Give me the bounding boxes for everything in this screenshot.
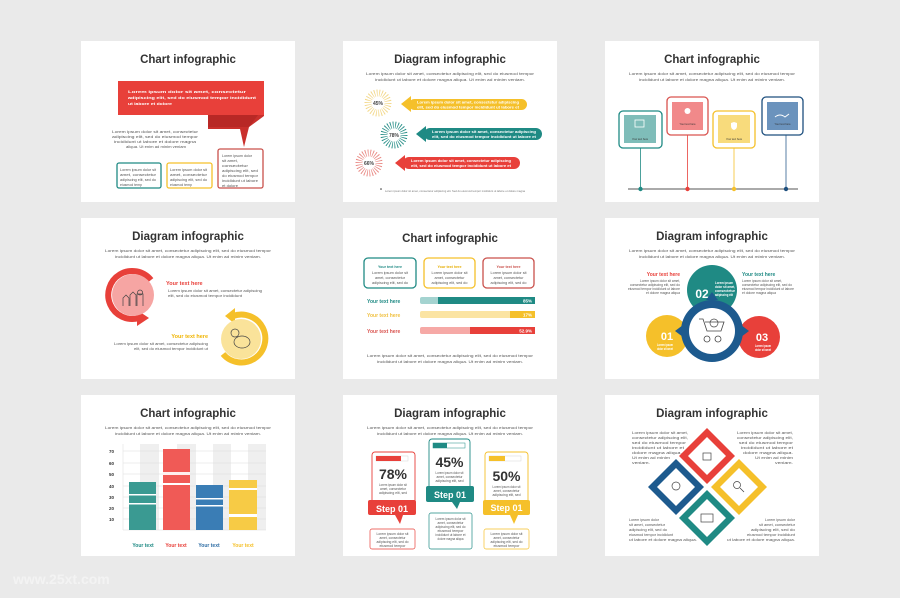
subtitle	[367, 425, 534, 436]
title: Diagram infographic	[132, 231, 245, 243]
box teal: amet, consectetur	[120, 172, 157, 177]
card 50%: 50%	[492, 468, 521, 484]
subtitle: incididunt ut labore et dolore magna aliqua. Ut enim ad minim veniam.	[639, 254, 785, 259]
text bottom-left: adipiscing elit, sed do	[629, 527, 668, 532]
subtitle: incididunt ut labore et dolore magna aliqua. Ut enim ad minim veniam.	[639, 77, 785, 82]
card 50%: Step 01	[490, 503, 523, 513]
box yellow: eiusmod temp	[170, 182, 193, 187]
red ribbon banner: Lorem ipsum dolor sit amet, consectetur	[128, 89, 247, 94]
title: Chart infographic	[140, 54, 237, 66]
card 45%: Lorem ipsum dolor sit	[436, 516, 466, 521]
title: Chart infographic	[140, 408, 237, 420]
text bottom-left	[629, 517, 697, 542]
card 78%: Step 01	[376, 504, 408, 514]
text bottom-right: ut labore et dolore magna aliqua.	[727, 537, 795, 542]
title: Diagram infographic	[656, 408, 769, 420]
card blue: Your text here	[774, 122, 791, 126]
title: Chart infographic	[402, 233, 499, 245]
left text: et dolore magna aliqua	[646, 290, 681, 295]
text block: adipiscing elit, sed do eiusmod tempor	[112, 134, 199, 139]
slide 7: bar chart	[81, 395, 295, 556]
box red: Lorem ipsum dolor	[222, 153, 253, 158]
left text: consectetur adipiscing elit, sed do	[630, 282, 681, 287]
text block: incididunt ut labore et dolore magna	[114, 139, 197, 144]
bar blue	[196, 485, 223, 530]
card 45%: amet, consectetur	[438, 520, 464, 525]
box red	[218, 149, 263, 188]
card 50%: amet, consectetur	[494, 488, 520, 493]
box red: consectetur	[222, 163, 249, 168]
circle 03: 03	[756, 332, 768, 344]
text bottom-right	[727, 517, 796, 542]
bar labels: Your text	[165, 543, 187, 549]
bar 17%	[367, 311, 535, 319]
text top-right	[737, 430, 794, 465]
text top-right: Ut enim ad minim	[755, 455, 794, 460]
red text	[166, 281, 262, 298]
subtitle: incididunt ut labore et dolore magna aliqua. Ut enim ad minim veniam.	[115, 431, 261, 436]
text top-right: consectetur adipiscing elit,	[737, 435, 793, 440]
card yellow: Your text here	[726, 137, 743, 141]
text top-right: dolore magna aliqua.	[743, 450, 793, 455]
slide 2: diagram arrows with sunbursts	[343, 41, 557, 202]
text top-left: dolore magna aliqua.	[632, 450, 682, 455]
card 45%: Lorem ipsum dolor sit	[436, 470, 464, 475]
card 78%	[368, 452, 416, 549]
slide 9: diagram diamonds	[605, 395, 819, 556]
box yellow: Lorem ipsum dolor sit	[432, 270, 468, 275]
text block: aliqua. Ut enim ad minim veniam	[126, 144, 187, 149]
text top-right: sed do eiusmod tempor	[739, 440, 794, 445]
arrow teal	[416, 126, 542, 142]
timeline line	[628, 188, 798, 190]
y axis labels: 30	[109, 495, 115, 500]
box red: et dolore	[222, 183, 239, 188]
circle 02: dolor sit amet,	[715, 284, 735, 289]
card 45%: adipiscing elit, sed	[436, 478, 464, 483]
box yellow: Your text here	[438, 265, 461, 269]
card 78%: eiusmod tempor	[380, 543, 406, 548]
card blue	[762, 97, 803, 191]
title: Chart infographic	[664, 54, 761, 66]
box teal: eiusmod temp	[120, 182, 143, 187]
bar labels	[132, 543, 254, 549]
subtitle: Lorem ipsum dolor sit amet, consectetur adipiscing elit, sed do eiusmod tempor	[105, 248, 272, 253]
box red	[483, 258, 534, 288]
diamond blue	[648, 459, 704, 515]
card 45%: 45%	[435, 454, 464, 470]
yellow text: Your text here	[171, 334, 208, 340]
left text: Your text here	[647, 272, 680, 278]
card 78%: Lorem ipsum dolor sit	[376, 531, 409, 536]
bar labels: Your text	[132, 543, 154, 549]
bar teal	[129, 482, 156, 530]
card 50%: Lorem ipsum dolor sit	[492, 484, 521, 489]
box teal: amet, consectetur	[375, 275, 406, 280]
subtitle: Lorem ipsum dolor sit amet, consectetur adipiscing elit, sed do eiusmod tempor	[629, 248, 796, 253]
card 50%: adipiscing elit, sed do	[490, 539, 523, 544]
box red: Your text here	[497, 265, 520, 269]
circle 02: Lorem ipsum	[715, 280, 733, 285]
left text	[628, 272, 681, 295]
box teal	[364, 258, 416, 288]
card 45%	[426, 439, 474, 549]
slide 1: chart infographic ribbon	[81, 41, 295, 202]
red text: Lorem ipsum dolor sit amet, consectetur adipiscing	[168, 288, 262, 293]
red text: elit, sed do eiusmod tempor incididunt	[168, 293, 243, 298]
subtitle	[629, 71, 796, 82]
title: Diagram infographic	[394, 54, 507, 66]
text top-left: consectetur adipiscing elit,	[632, 435, 688, 440]
box yellow: adipiscing elit, sed do	[170, 177, 208, 182]
box red: Lorem ipsum dolor sit	[490, 270, 527, 275]
red ribbon banner	[118, 81, 264, 147]
title: Diagram infographic	[656, 231, 769, 243]
circle 03: Lorem ipsum	[755, 343, 771, 348]
circle 01: dolor sit amet	[657, 346, 673, 351]
text bottom-right: eiusmod tempor incididunt	[747, 532, 796, 537]
card 50%	[483, 452, 530, 549]
subtitle	[105, 248, 272, 259]
yellow cycle icon	[221, 308, 265, 363]
text bottom-left: ut labore et dolore magna aliqua.	[629, 537, 697, 542]
bar 52.9%: Your text here	[367, 329, 400, 335]
text bottom-right: sit amet, consectetur	[759, 522, 796, 527]
bar 85%: 85%	[523, 298, 532, 304]
box red: sit amet,	[222, 158, 238, 163]
card 45%: eiusmod tempor	[438, 528, 464, 533]
y axis labels: 60	[109, 461, 115, 466]
subtitle	[629, 248, 796, 259]
left text: Lorem ipsum dolor sit amet,	[640, 278, 680, 283]
circle 03	[738, 316, 780, 358]
card teal: Your text here	[632, 137, 649, 141]
yellow text: Lorem ipsum dolor sit amet, consectetur adipiscing	[114, 341, 208, 346]
box yellow: Lorem ipsum dolor sit	[170, 167, 208, 172]
box yellow	[424, 258, 475, 288]
subtitle	[105, 425, 272, 436]
circle 01	[646, 315, 688, 357]
card 78%: Lorem ipsum dolor sit	[379, 482, 408, 487]
bar labels: Your text	[198, 543, 220, 549]
bar 52.9%: 52.9%	[519, 328, 532, 334]
box red: do eiusmod tempor	[222, 173, 259, 178]
box yellow: amet, consectetur	[170, 172, 208, 177]
right text: eiusmod tempor incididunt ut labore	[742, 286, 795, 291]
sunburst 45%: 45%	[373, 101, 384, 107]
subtitle: Lorem ipsum dolor sit amet, consectetur adipiscing elit, sed do eiusmod tempor	[105, 425, 272, 430]
box teal	[117, 163, 161, 188]
text bottom-left: sit amet, consectetur	[629, 522, 666, 527]
card 78%: amet, consectetur	[380, 535, 406, 540]
red ribbon banner: adipiscing elit, sed do eiusmod tempor incididunt	[128, 95, 257, 100]
footer text: Lorem ipsum dolor sit amet, consectetur adipiscing elit, sed do eiusmod tempor	[367, 353, 534, 358]
right text: Your text here	[742, 272, 775, 278]
y axis labels: 70	[109, 449, 115, 454]
diamond teal	[679, 490, 735, 546]
bar 85%	[367, 297, 535, 305]
slide 4: diagram circular arrows	[81, 218, 295, 379]
text bottom-right: adipiscing elit, sed do	[751, 527, 796, 532]
y axis labels	[109, 449, 115, 522]
slide 5: chart progress bars	[343, 218, 557, 379]
right text: Lorem ipsum dolor sit amet,	[742, 278, 782, 283]
subtitle: Lorem ipsum dolor sit amet, consectetur adipiscing elit, sed do eiusmod tempor	[366, 71, 535, 76]
card 45%: Step 01	[434, 490, 466, 500]
text bottom-left: eiusmod tempor incididunt	[629, 532, 674, 537]
box teal: Lorem ipsum dolor sit	[372, 270, 409, 275]
text top-left: Lorem ipsum dolor sit amet,	[632, 430, 688, 435]
yellow text	[114, 334, 209, 351]
box teal: adipiscing elit, sed do	[120, 177, 157, 182]
text top-left	[632, 430, 688, 465]
card 50%: adipiscing elit, sed	[492, 492, 520, 497]
arrow red: Lorem ipsum dolor sit amet, consectetur adipiscing	[411, 158, 512, 163]
circle 01: 01	[661, 331, 673, 343]
text top-right: veniam.	[775, 460, 793, 465]
text bottom-right: Lorem ipsum dolor	[765, 517, 796, 522]
sunburst 66%: 66%	[364, 161, 375, 167]
box teal: Your text here	[378, 265, 402, 269]
bar 17%: Your text here	[367, 313, 400, 319]
slide 3: chart timeline boxes	[605, 41, 819, 202]
text top-left: veniam.	[632, 460, 650, 465]
box yellow: amet, consectetur	[434, 275, 465, 280]
subtitle	[366, 71, 535, 82]
sunburst 78%	[384, 125, 404, 145]
card 78%: 78%	[379, 466, 408, 482]
text top-right: Lorem ipsum dolor sit amet,	[737, 430, 793, 435]
y axis labels: 50	[109, 472, 115, 477]
sunburst 66%	[359, 153, 379, 173]
box red: adipiscing elit, sed do	[490, 280, 527, 285]
diamond red	[679, 428, 735, 484]
subtitle: incididunt ut labore et dolore magna aliqua. Ut enim ad minim veniam.	[377, 431, 523, 436]
arrow teal: elit, sed do eiusmod tempor incididunt ut labore et	[432, 134, 537, 139]
card 78%: adipiscing elit, sed	[379, 490, 407, 495]
bar labels: Your text	[232, 543, 254, 549]
subtitle: Lorem ipsum dolor sit amet, consectetur adipiscing elit, sed do eiusmod tempor	[367, 425, 534, 430]
central ring with cart	[675, 292, 749, 362]
text top-left: sed do eiusmod tempor	[632, 440, 687, 445]
card 78%: amet, consectetur	[380, 486, 407, 491]
arrow red	[395, 155, 520, 171]
slide 8: diagram step cards	[343, 395, 557, 556]
chart grid	[123, 444, 266, 530]
text top-left: incididunt ut labore et	[632, 445, 685, 450]
title: Diagram infographic	[394, 408, 507, 420]
arrow yellow: Lorem ipsum dolor sit amet, consectetur adipiscing	[417, 100, 520, 104]
card 45%: incididunt ut labore et	[436, 532, 466, 537]
text top-left: Ut enim ad minim	[632, 455, 671, 460]
right text: et dolore magna aliqua	[742, 290, 777, 295]
left text: eiusmod tempor incididunt ut labore	[628, 286, 681, 291]
box yellow	[167, 163, 212, 188]
y axis labels: 20	[109, 506, 115, 511]
circle 02: adipiscing elit	[715, 292, 733, 297]
footer text: incididunt ut labore et dolore magna aliqua. Ut enim ad minim veniam.	[377, 359, 523, 364]
arrow red: elit, sed do eiusmod tempor incididunt ut labore et	[411, 163, 512, 168]
box teal: adipiscing elit, sed do	[372, 280, 409, 285]
text bottom-left: Lorem ipsum dolor	[629, 517, 660, 522]
subtitle: incididunt ut labore et dolore magna aliqua. Ut enim ad minim veniam.	[375, 77, 525, 82]
subtitle: Lorem ipsum dolor sit amet, consectetur adipiscing elit, sed do eiusmod tempor	[629, 71, 796, 76]
yellow text: elit, sed do eiusmod tempor incididunt ut	[134, 346, 209, 351]
card yellow	[713, 111, 755, 191]
circle 02: consectetur	[715, 288, 735, 293]
y axis labels: 10	[109, 517, 115, 522]
watermark: www.25xt.com	[12, 571, 110, 587]
arrow teal: Lorem ipsum dolor sit amet, consectetur adipiscing	[432, 129, 537, 134]
right text	[742, 272, 795, 295]
sunburst 45%	[368, 93, 388, 113]
right text: consectetur adipiscing elit, sed do	[742, 282, 793, 287]
bar 17%: 17%	[523, 312, 532, 318]
card teal	[619, 111, 662, 191]
text block: Lorem ipsum dolor sit amet, consectetur	[112, 129, 199, 134]
text block	[112, 129, 199, 149]
red ribbon banner: ut labore et dolore	[128, 101, 173, 106]
footnote: Lorem ipsum dolor sit amet, consectetur adipiscing elit. Sed do eiusmod tempor incididunt ut labore et dolore magna	[385, 190, 526, 193]
card 50%: Lorem ipsum dolor sit	[490, 531, 523, 536]
diamond yellow	[711, 459, 767, 515]
bar red	[163, 449, 190, 530]
circle 02: 02	[695, 287, 709, 301]
arrow yellow: elit, sed do eiusmod tempor incididunt ut labore et	[417, 104, 520, 110]
card 45%: dolore magna aliqua	[438, 536, 464, 541]
card 50%: eiusmod tempor	[494, 543, 520, 548]
card red	[667, 97, 708, 191]
bar 52.9%	[367, 327, 535, 335]
arrow yellow	[401, 96, 527, 112]
box red: incididunt ut labore	[222, 178, 259, 183]
footer text	[367, 353, 534, 364]
red text: Your text here	[166, 281, 203, 287]
red cycle icon	[108, 271, 154, 326]
text top-right: incididunt ut labore et	[741, 445, 794, 450]
card 45%: adipiscing elit, sed do	[436, 524, 466, 529]
card 50%: amet, consectetur	[494, 535, 520, 540]
circle 01: Lorem ipsum	[657, 342, 673, 347]
y axis labels: 40	[109, 484, 115, 489]
card 78%: adipiscing elit, sed do	[376, 539, 409, 544]
sunburst 78%: 78%	[389, 133, 400, 139]
box red: adipiscing elit, sed	[222, 168, 258, 173]
slide 6: diagram three circles	[605, 218, 819, 379]
circle 03: dolor sit amet	[755, 347, 771, 352]
bar yellow	[229, 480, 257, 530]
box teal: Lorem ipsum dolor sit	[120, 167, 157, 172]
card red: Your text here	[679, 122, 696, 126]
circle 02	[687, 265, 737, 315]
bar 85%: Your text here	[367, 299, 400, 305]
box red: amet, consectetur	[494, 275, 524, 280]
subtitle: incididunt ut labore et dolore magna aliqua. Ut enim ad minim veniam.	[115, 254, 261, 259]
box yellow: adipiscing elit, sed do	[432, 280, 468, 285]
card 45%: amet, consectetur	[436, 474, 463, 479]
